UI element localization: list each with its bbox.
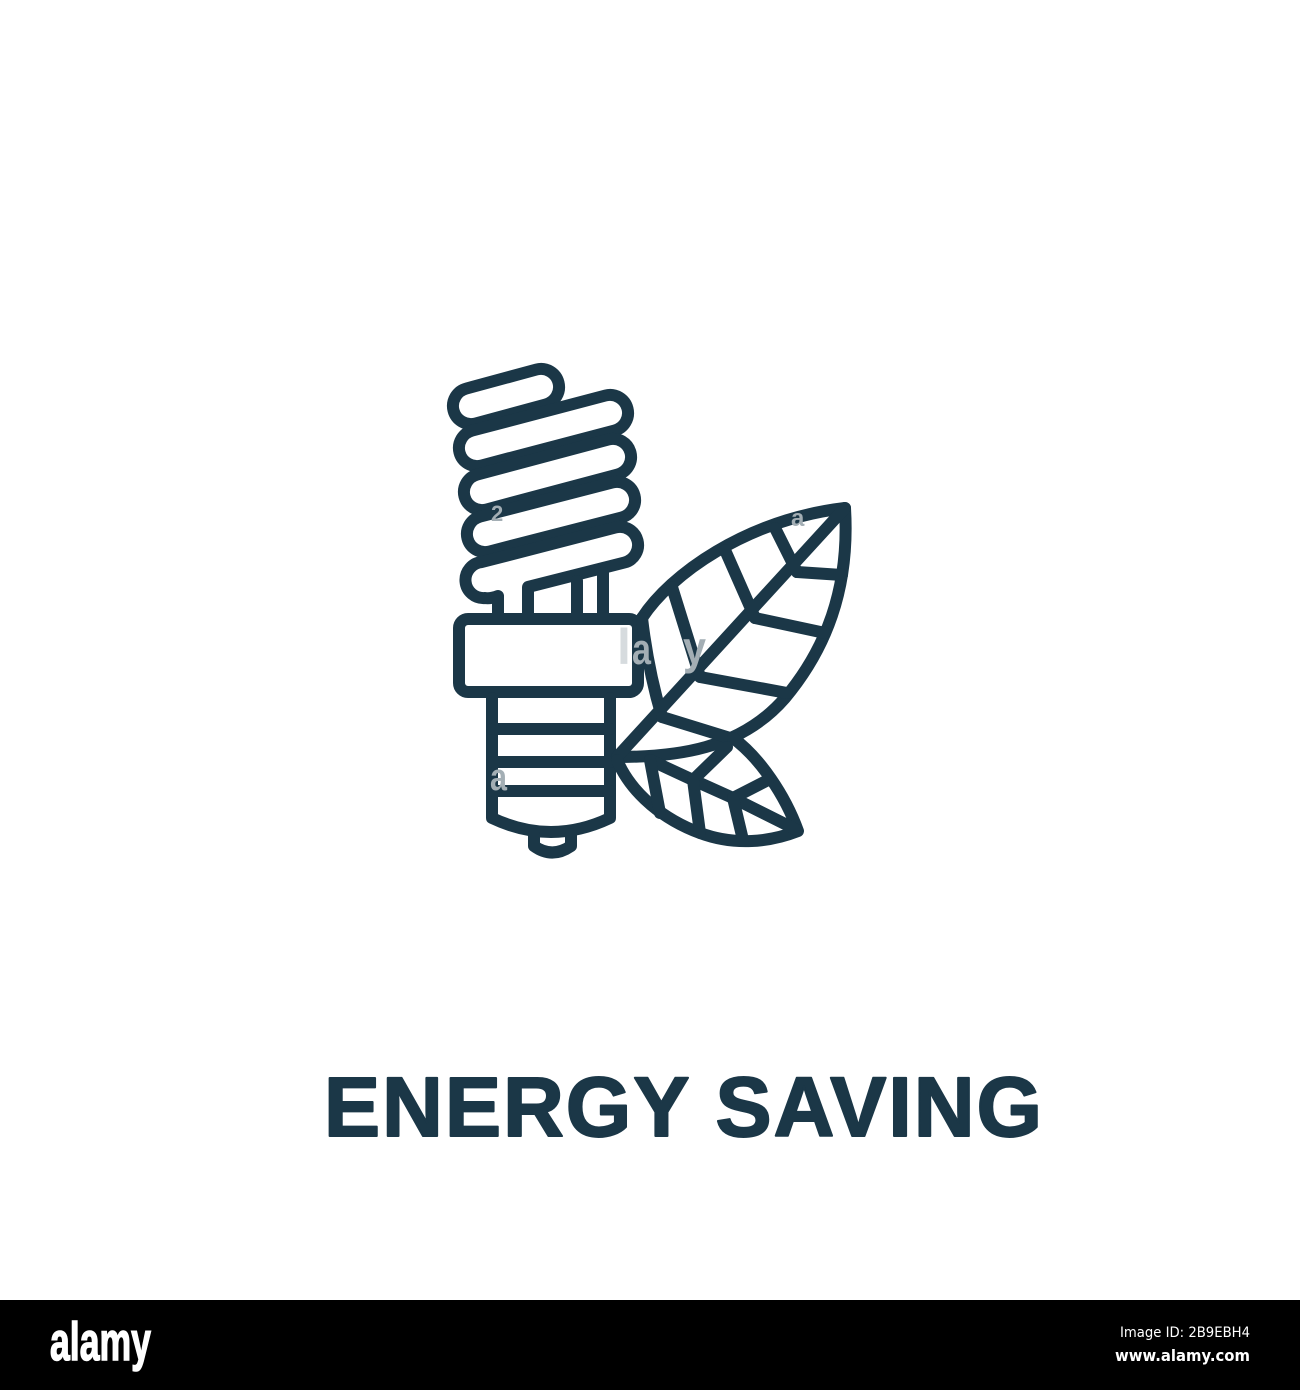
icon: large leaf: [617, 508, 846, 757]
watermark letters over icon: a: [632, 625, 651, 674]
watermark letters over icon: a: [791, 505, 805, 532]
icon: small leaf: [617, 738, 798, 841]
image id: Image ID: 2B9EBH4: [1120, 1325, 1250, 1341]
footer bar: [0, 1300, 1300, 1390]
watermark letters over icon: l: [617, 619, 631, 675]
title: ENERGY SAVING: [324, 1060, 1042, 1154]
icon: energy saving bulb with leaves: [453, 369, 846, 852]
icon: spiral bulb coil: [453, 369, 638, 614]
watermark letters over icon: [490, 501, 805, 799]
watermark letters over icon: a: [490, 757, 508, 799]
watermark letters over icon: y: [683, 622, 706, 674]
logo text: alamy: [50, 1312, 151, 1372]
watermark letters over icon: 2: [491, 501, 503, 526]
icon: bulb base: [459, 619, 638, 852]
website: www.alamy.com: [1115, 1346, 1250, 1365]
